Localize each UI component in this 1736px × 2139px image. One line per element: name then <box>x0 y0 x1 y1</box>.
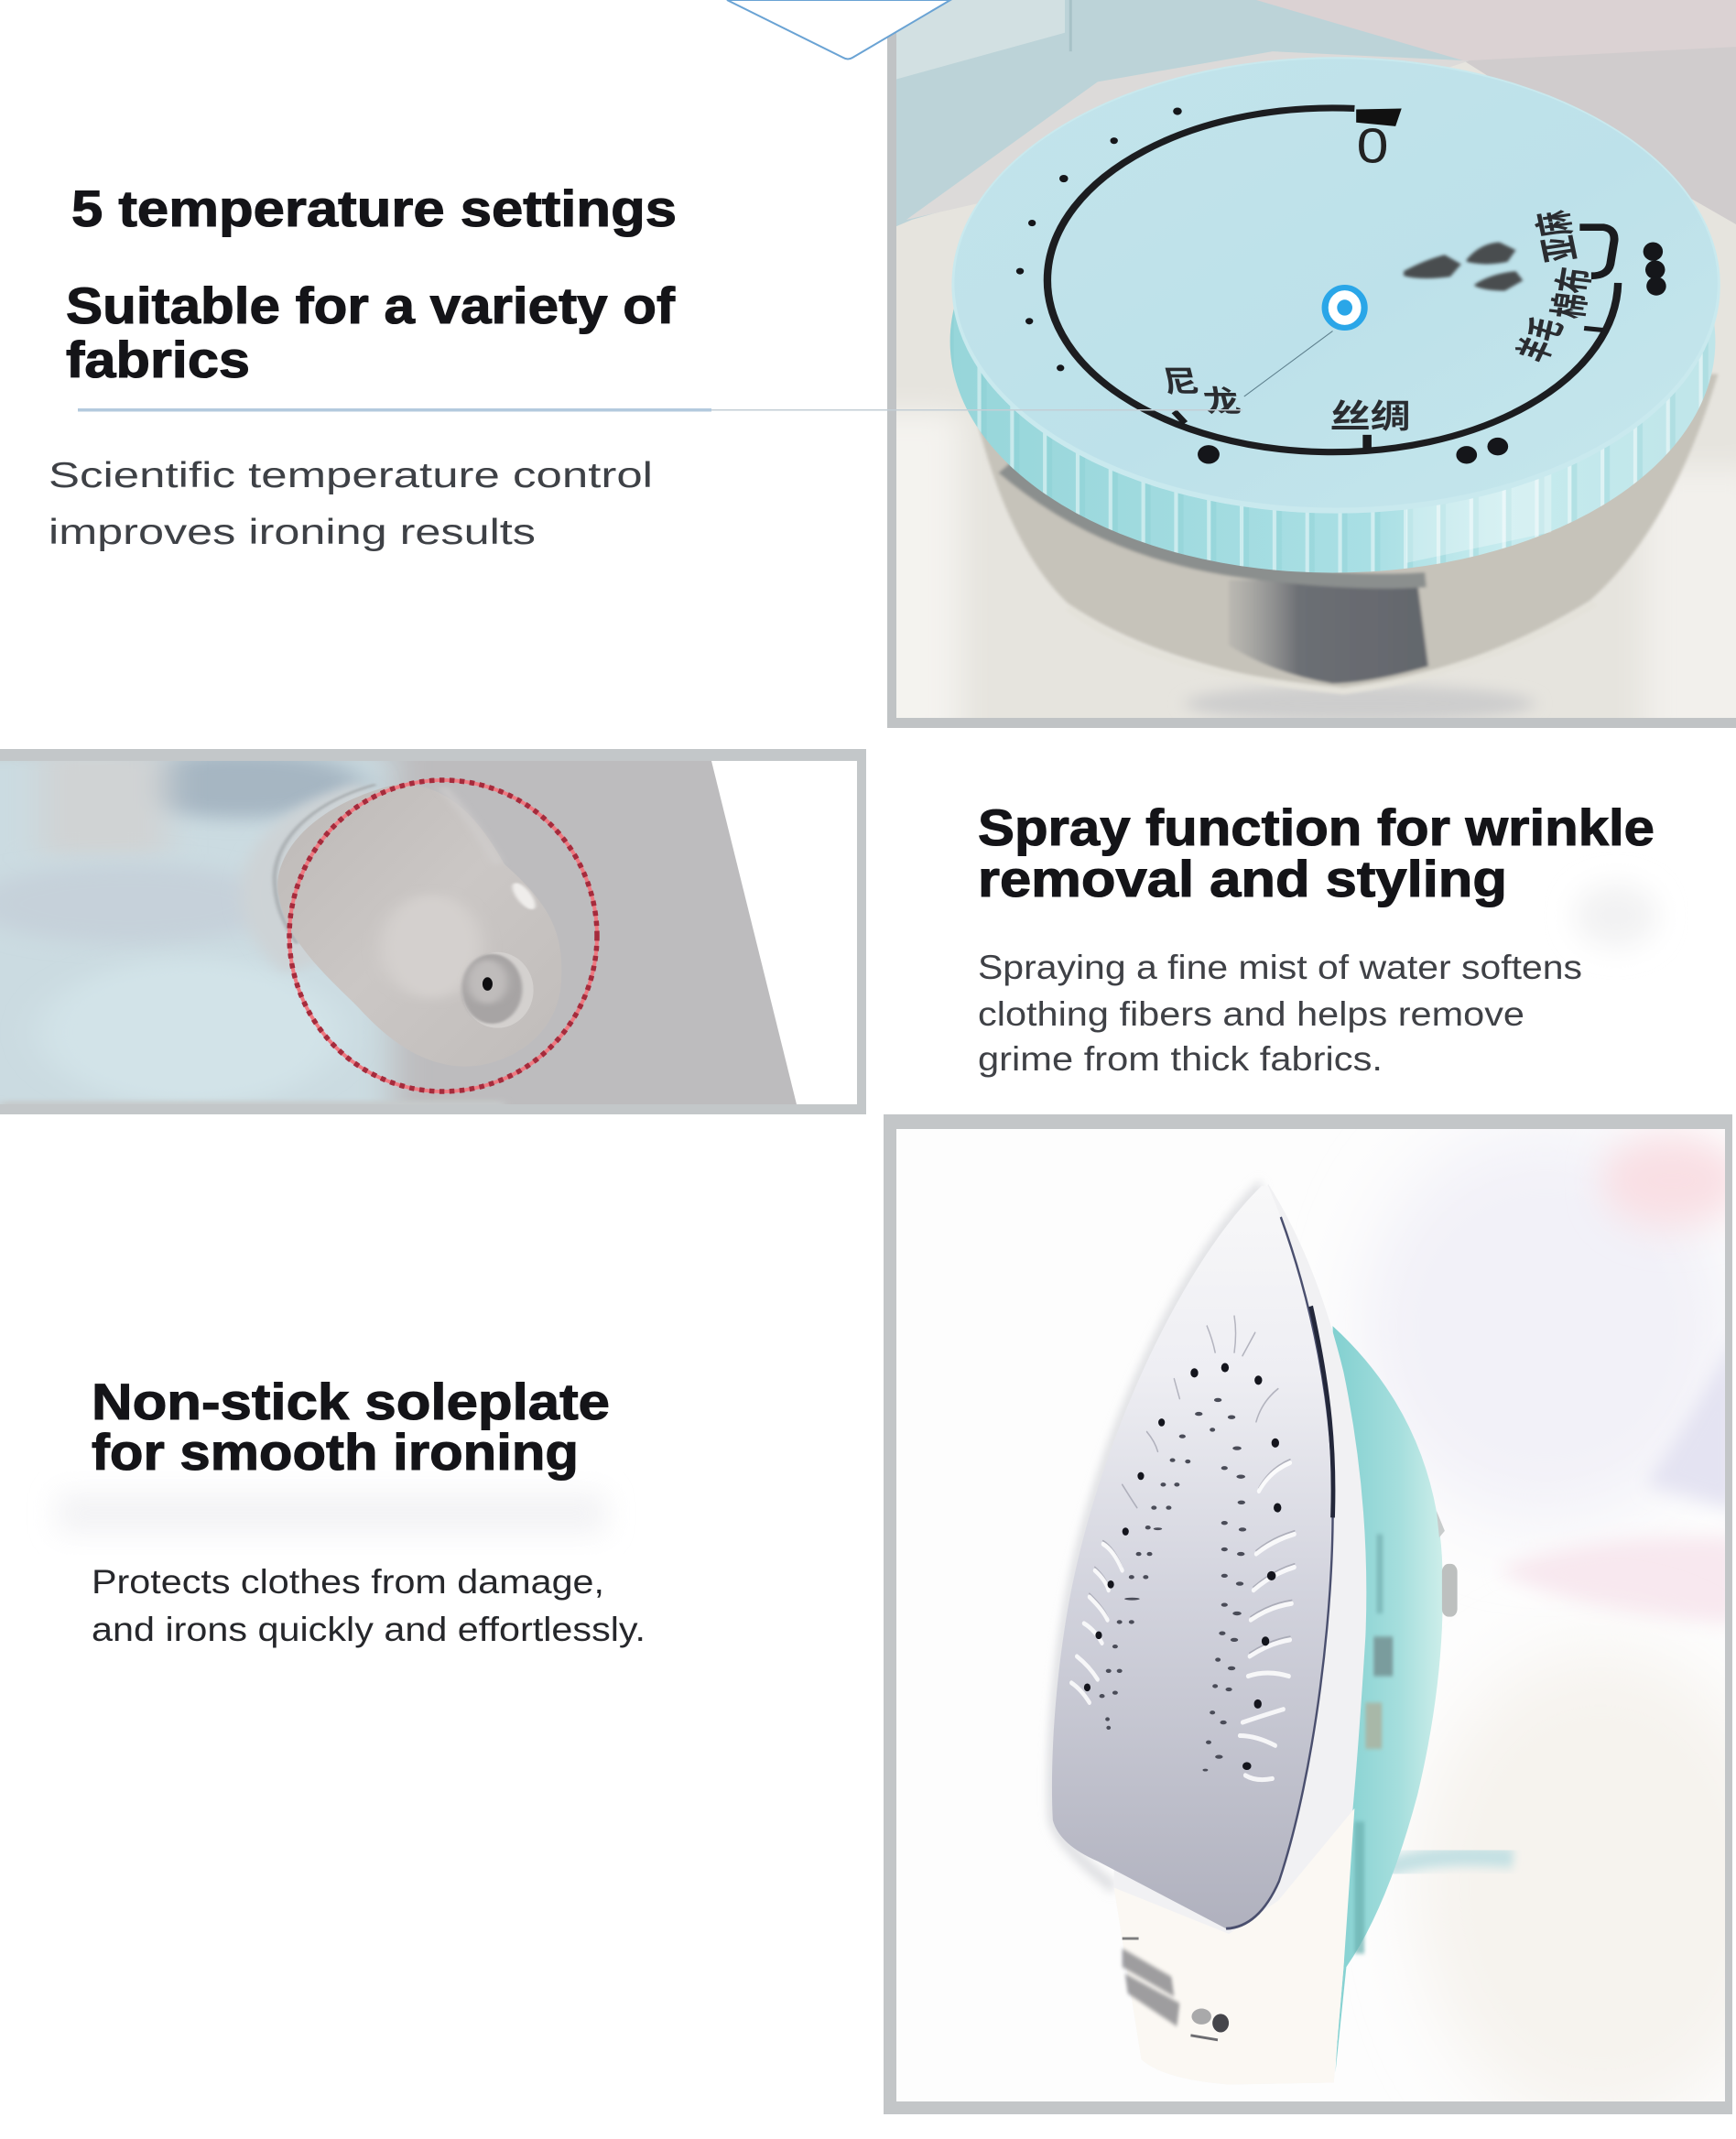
decorative diamond callout <box>727 0 950 59</box>
iron heel label <box>1123 1938 1229 2041</box>
heading: spray function <box>978 798 1655 907</box>
dial top face <box>951 57 1720 514</box>
center pointer <box>1244 288 1364 396</box>
heading: 5 temperature settings: 5 temperature settings <box>71 179 677 237</box>
red dotted highlight circle <box>289 780 597 1091</box>
steam vent slash shadows <box>1090 1316 1295 1653</box>
heading: suitable for fabrics: fabrics <box>66 331 250 388</box>
fabric labels: 龙 <box>1200 384 1243 418</box>
fabric labels: 亚麻 <box>1532 208 1585 265</box>
heading: spray function: removal and styling <box>978 850 1507 907</box>
text: spray description: Spraying a fine mist of water softens <box>978 949 1582 986</box>
steam holes <box>1084 1363 1281 1770</box>
zero label: 0 <box>1357 119 1389 174</box>
panel: non-stick text <box>57 1373 646 1648</box>
panel: spray text <box>978 798 1657 1078</box>
nozzle body <box>277 785 561 1067</box>
zero marker <box>1356 108 1402 126</box>
text: scientific temperature control: improves ironing results <box>49 513 536 552</box>
nozzle spray hole <box>461 952 534 1028</box>
heading: non-stick soleplate: for smooth ironing <box>92 1423 579 1481</box>
soft highlight <box>1575 884 1657 948</box>
text: scientific temperature control <box>49 456 653 552</box>
small tick dots <box>1016 107 1182 371</box>
text: non-stick description: and irons quickly and effortlessly. <box>92 1611 646 1648</box>
small vents <box>1100 1398 1246 1771</box>
text: non-stick description: Protects clothes from damage, <box>92 1563 604 1601</box>
heading: suitable for fabrics <box>66 277 675 388</box>
fabric labels: 丝绸 <box>1330 399 1411 435</box>
iron white housing <box>1114 1184 1366 2085</box>
high heat bracket <box>1579 227 1614 276</box>
panel: iron photo <box>884 1114 1736 2125</box>
steam vent slashes <box>1071 1462 1295 1780</box>
shadow below dial <box>1185 685 1535 722</box>
text: spray description: grime from thick fabrics. <box>978 1040 1383 1078</box>
heat level dots <box>1198 242 1666 464</box>
text: spray description: clothing fibers and helps remove <box>978 995 1524 1033</box>
panel: temperature dial photo <box>857 0 1736 748</box>
fabric labels: 尼 <box>1159 364 1202 398</box>
nozzle collar <box>251 783 369 969</box>
iron symbols <box>1404 242 1523 291</box>
white cut-out corner <box>711 761 857 1104</box>
panel: temperature text <box>49 179 1242 552</box>
dial ribbed skirt <box>950 309 1716 573</box>
iron cord <box>1387 1856 1514 1868</box>
text: scientific temperature control: Scientific temperature control <box>49 456 653 495</box>
dial scale ring <box>1047 108 1618 452</box>
heading: suitable for fabrics: Suitable for a variety of <box>66 277 675 334</box>
fabric background <box>1379 1129 1725 2101</box>
iron soleplate <box>1052 1186 1333 1928</box>
heading: spray function: Spray function for wrinkle <box>978 798 1655 856</box>
fabric labels: 羊毛 <box>1511 312 1571 367</box>
text: spray description <box>978 949 1582 1078</box>
soft shadow behind heading <box>57 1493 606 1534</box>
heading: non-stick soleplate: Non-stick soleplate <box>92 1373 610 1430</box>
heading: non-stick soleplate <box>92 1373 610 1481</box>
callout leader line <box>78 408 1242 412</box>
fabric labels: 棉布 <box>1547 266 1599 321</box>
dial base cylinder <box>967 374 1718 691</box>
text: non-stick description <box>92 1563 646 1648</box>
iron teal shell <box>1333 1326 1458 2073</box>
fabric labels <box>1159 208 1599 435</box>
panel: spray nozzle photo <box>0 749 866 1114</box>
sole drop shadow <box>1052 1186 1262 1887</box>
